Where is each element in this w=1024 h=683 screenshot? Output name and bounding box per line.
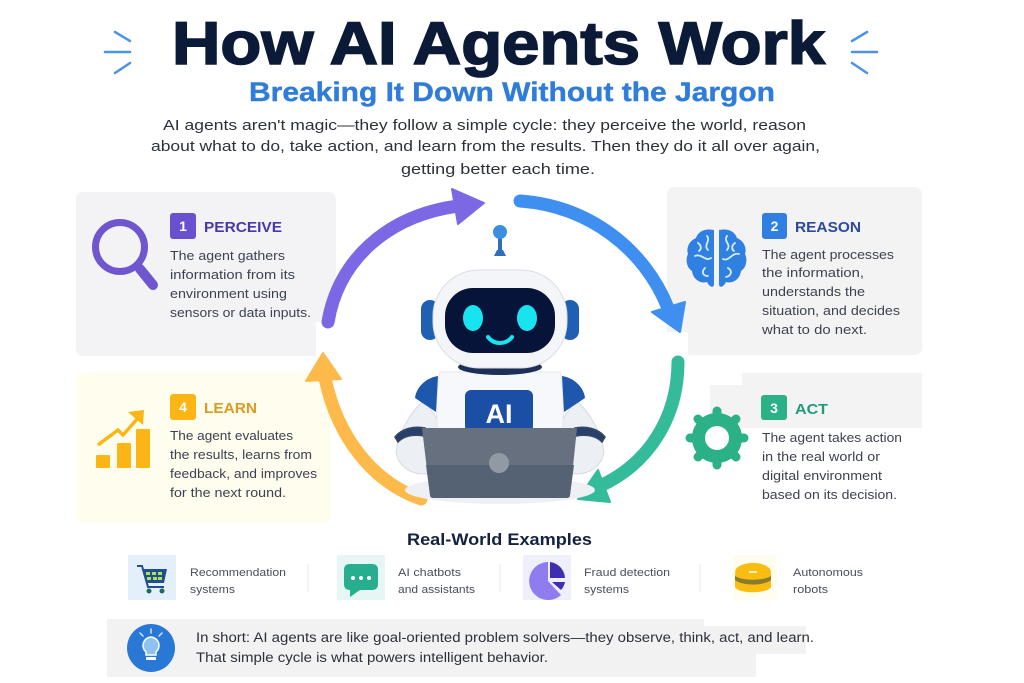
act text: digital environment xyxy=(762,469,883,483)
AI chest badge: AI xyxy=(486,399,512,429)
badge 1: 1 xyxy=(179,218,187,234)
label: Autonomous xyxy=(793,567,864,579)
body xyxy=(437,372,563,440)
arrow: act to learn xyxy=(578,362,678,502)
learn text: for the next round. xyxy=(170,486,286,500)
intro text: getting better each time. xyxy=(401,161,595,178)
intro text: about what to do, take action, and learn from the results. Then they do it all over again, xyxy=(151,138,820,155)
label xyxy=(398,567,476,596)
icon: left spark lines xyxy=(105,32,130,73)
icon: brain xyxy=(687,229,746,287)
example: autonomous robots xyxy=(733,555,864,600)
AI chest badge xyxy=(465,390,533,432)
label: systems xyxy=(584,584,630,596)
perceive text: sensors or data inputs. xyxy=(170,306,311,320)
icon: chat bubble xyxy=(337,555,385,600)
badge 2 xyxy=(762,213,787,239)
perceive text: The agent gathers xyxy=(170,249,285,263)
label: and assistants xyxy=(398,584,476,596)
neck xyxy=(458,359,542,375)
arrow: reason to act xyxy=(520,201,685,332)
badge 4 xyxy=(170,394,196,420)
summary text: In short: AI agents are like goal-oriented problem solvers—they observe, think, act, and learn. xyxy=(196,630,814,645)
heading: act: ACT xyxy=(795,402,828,418)
label: systems xyxy=(190,584,236,596)
robot illustration xyxy=(395,225,605,504)
panel: perceive xyxy=(76,192,336,356)
learn text: The agent evaluates xyxy=(170,429,293,443)
example: fraud detection xyxy=(523,555,670,600)
act text: in the real world or xyxy=(762,450,880,464)
label xyxy=(190,567,286,596)
arms xyxy=(396,400,604,474)
reason text xyxy=(761,248,900,337)
label: robots xyxy=(793,584,829,596)
example: recommendation systems xyxy=(128,555,286,600)
subtitle: Breaking It Down Without the Jargon xyxy=(249,77,775,107)
visor xyxy=(445,288,555,353)
eyes and smile xyxy=(463,305,537,343)
hands xyxy=(395,427,605,442)
laptop xyxy=(422,428,577,498)
act text xyxy=(762,431,902,502)
icon: robot vacuum xyxy=(733,555,777,600)
badge 3: 3 xyxy=(770,400,778,416)
antenna xyxy=(493,225,507,256)
section heading: real-world examples: Real-World Examples xyxy=(407,531,592,549)
label: AI chatbots xyxy=(398,567,462,579)
label: Recommendation xyxy=(190,567,286,579)
title: How AI Agents Work xyxy=(172,10,826,77)
icon: shopping cart xyxy=(128,555,176,600)
label xyxy=(584,567,670,596)
panel: act xyxy=(690,373,922,502)
reason text: situation, and decides xyxy=(762,304,900,318)
summary bar xyxy=(107,619,814,677)
heading: perceive: PERCEIVE xyxy=(204,220,282,236)
reason text: understands the xyxy=(762,285,865,299)
reason text: The agent processes xyxy=(762,248,894,262)
label xyxy=(793,567,864,596)
panel: learn xyxy=(76,372,331,523)
act text: The agent takes action xyxy=(762,431,902,445)
perceive text: information from its xyxy=(170,268,295,282)
icon: right spark lines xyxy=(852,32,877,73)
badge 2: 2 xyxy=(771,218,779,234)
heading: reason: REASON xyxy=(795,220,861,236)
perceive text: environment using xyxy=(170,287,287,301)
perceive text xyxy=(170,249,311,320)
icon: magnifying glass xyxy=(96,222,153,285)
panel: reason xyxy=(667,187,922,355)
learn text: feedback, and improves xyxy=(170,467,317,481)
act text: based on its decision. xyxy=(762,488,897,502)
icon: gear xyxy=(690,411,744,465)
summary text: That simple cycle is what powers intelligent behavior. xyxy=(196,650,548,665)
badge 4: 4 xyxy=(179,399,187,415)
intro text: AI agents aren't magic—they follow a simple cycle: they perceive the world, reason xyxy=(163,117,806,134)
icon: growth chart xyxy=(96,410,150,468)
badge 3 xyxy=(761,395,787,420)
summary text xyxy=(196,630,814,665)
icon: pie chart xyxy=(523,555,571,600)
arrow: perceive to reason xyxy=(328,189,484,322)
reason text: what to do next. xyxy=(761,323,867,337)
learn text xyxy=(170,429,317,500)
reason text: the information, xyxy=(762,266,864,280)
head xyxy=(433,270,567,368)
arrow: learn to perceive xyxy=(306,353,421,499)
soft shadow xyxy=(405,476,595,504)
label: Fraud detection xyxy=(584,567,670,579)
ears xyxy=(421,300,579,340)
shoulders xyxy=(415,376,585,412)
heading: learn: LEARN xyxy=(204,401,257,417)
example: AI chatbots xyxy=(337,555,476,600)
learn text: the results, learns from xyxy=(170,448,312,462)
intro text xyxy=(151,117,820,178)
icon: light bulb xyxy=(127,624,175,672)
badge 1 xyxy=(170,213,196,239)
